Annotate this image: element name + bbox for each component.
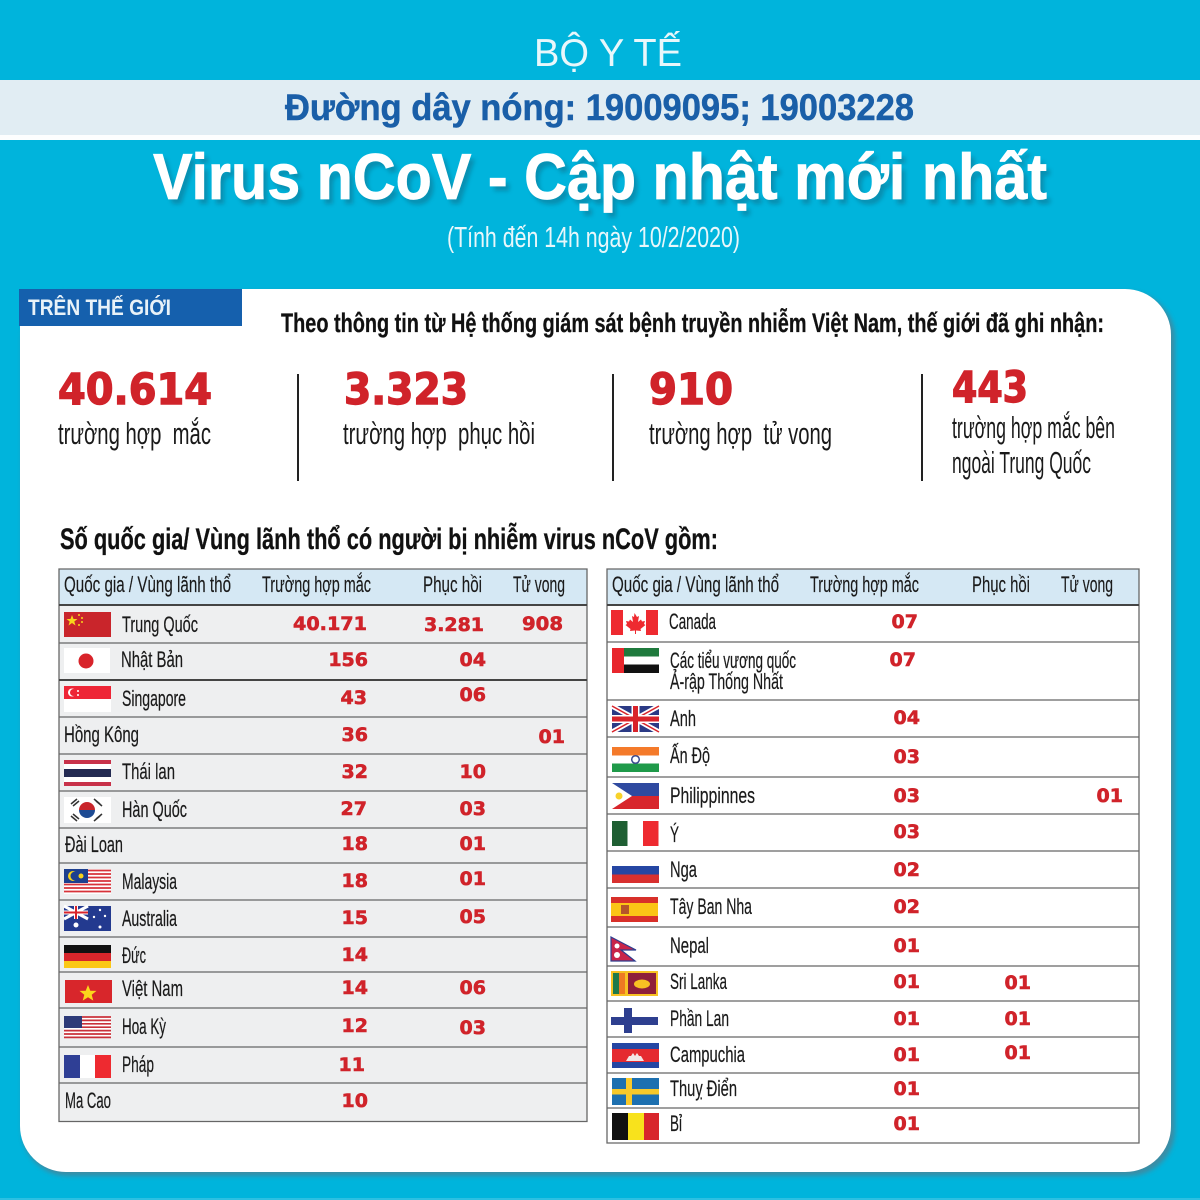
- row: Đài Loan: 01: [460, 833, 486, 855]
- stat: deaths: [649, 365, 832, 451]
- stat: total cases: 40.614: [58, 365, 212, 415]
- row: Các tiểu vương quốc Ả-rập Thống Nhất: [612, 648, 916, 694]
- row: Sri Lanka: 01: [894, 971, 920, 993]
- row: Hàn Quốc: Hàn Quốc: [122, 797, 187, 822]
- row: Các tiểu vương quốc Ả-rập Thống Nhất: Các tiểu vương quốc: [670, 648, 796, 673]
- row: Hàn Quốc: 03: [460, 798, 486, 820]
- row: Đài Loan: Đài Loan: [65, 832, 123, 857]
- title: Virus nCoV - Cập nhật mới nhất: [153, 140, 1047, 213]
- row: Hàn Quốc: 27: [341, 798, 367, 820]
- section tab: TRÊN THẾ GIỚI: [28, 295, 171, 320]
- row: Ma Cao: Ma Cao: [65, 1088, 111, 1113]
- row: Canada: 07: [892, 611, 918, 633]
- stat: total cases: trường hợp mắc: [58, 416, 211, 451]
- row: Nhật Bản: [64, 647, 486, 673]
- row: Ma Cao: 10: [342, 1090, 368, 1112]
- stat: outside China: 443: [952, 363, 1028, 413]
- stat: recovered: trường hợp phục hồi: [343, 416, 535, 451]
- panel: world statistics: [20, 289, 1175, 1176]
- row: Đức: 14: [342, 944, 368, 966]
- left table header: Trường hợp mắc: [262, 572, 371, 597]
- row: Singapore: [64, 684, 486, 712]
- row: Việt Nam: [65, 976, 486, 1003]
- row: Malaysia: Malaysia: [122, 869, 177, 894]
- row: Pháp: Pháp: [122, 1052, 154, 1077]
- row: Đức: [64, 943, 368, 968]
- row: Nepal: 01: [894, 935, 920, 957]
- row: Philippinnes: 01: [1097, 785, 1123, 807]
- row: Campuchia: Campuchia: [670, 1042, 745, 1067]
- row: Campuchia: [612, 1042, 1031, 1068]
- row: Bỉ: Bỉ: [670, 1111, 682, 1136]
- right table header: Quốc gia / Vùng lãnh thổ: [612, 572, 779, 597]
- row: Tây Ban Nha: [611, 894, 920, 922]
- row: Nhật Bản: 04: [460, 649, 486, 671]
- row: Hồng Kông: Hồng Kông: [64, 722, 139, 747]
- row: Australia: 15: [342, 907, 368, 929]
- stat: deaths: trường hợp tử vong: [649, 416, 832, 451]
- row: Sri Lanka: Sri Lanka: [670, 969, 727, 994]
- stat: outside China: ngoài Trung Quốc: [952, 445, 1091, 480]
- row: Australia: Australia: [122, 906, 177, 931]
- row: Anh: 04: [894, 707, 920, 729]
- right table header: Tử vong: [1061, 572, 1113, 597]
- row: Thái lan: 10: [460, 761, 486, 783]
- row: Hoa Kỳ: [64, 1014, 486, 1039]
- row: Ấn Độ: 03: [894, 746, 920, 768]
- row: Nhật Bản: 156: [328, 649, 368, 671]
- row: Tây Ban Nha: 02: [894, 896, 920, 918]
- row: Ý: Ý: [670, 822, 679, 847]
- row: Việt Nam: Việt Nam: [122, 976, 183, 1001]
- row: Malaysia: 18: [342, 870, 368, 892]
- hotline band: Đường dây nóng: 19009095; 19003228: [285, 87, 914, 128]
- row: Thuỵ Điển: [612, 1076, 920, 1105]
- row: Anh: [612, 706, 920, 732]
- row: Pháp: [64, 1052, 365, 1078]
- row: Hoa Kỳ: 03: [460, 1017, 486, 1039]
- row: Thuỵ Điển: Thuỵ Điển: [670, 1076, 737, 1101]
- row: Nepal: [611, 933, 920, 961]
- row: Bỉ: 01: [894, 1113, 920, 1135]
- row: Philippinnes: Philippinnes: [670, 783, 755, 808]
- countries heading: Số quốc gia/ Vùng lãnh thổ có người bị nhiễm virus nCoV gồm:: [60, 522, 718, 556]
- row: Ấn Độ: Ấn Độ: [670, 743, 710, 768]
- row: Canada: Canada: [669, 609, 716, 634]
- row: Nepal: Nepal: [670, 933, 709, 958]
- row: Canada: [611, 609, 918, 635]
- left table header: Phục hồi: [423, 572, 482, 597]
- row: Bỉ: [612, 1111, 920, 1140]
- stat: outside China: [952, 363, 1115, 480]
- row: Ma Cao: [65, 1088, 368, 1113]
- stat: deaths: 910: [649, 365, 733, 415]
- row: Australia: 05: [460, 906, 486, 928]
- right table header: Trường hợp mắc: [810, 572, 919, 597]
- right table header: [612, 572, 1113, 597]
- stat: total cases: [58, 365, 212, 451]
- row: Đài Loan: 18: [342, 833, 368, 855]
- row: Hoa Kỳ: 12: [342, 1015, 368, 1037]
- row: Sri Lanka: [611, 969, 1031, 996]
- row: Việt Nam: 14: [342, 977, 368, 999]
- row: Pháp: 11: [339, 1054, 365, 1076]
- row: Singapore: 06: [460, 684, 486, 706]
- row: Hoa Kỳ: Hoa Kỳ: [122, 1014, 166, 1039]
- row: Phần Lan: 01: [1005, 1008, 1031, 1030]
- row: Thái lan: [64, 759, 486, 786]
- row: Trung Quốc: 3.281: [424, 614, 484, 636]
- row: Trung Quốc: 40.171: [293, 613, 367, 635]
- row: Phần Lan: [611, 1006, 1031, 1033]
- row: Trung Quốc: 908: [522, 613, 563, 635]
- row: Đài Loan: [65, 832, 486, 857]
- row: Ý: 03: [894, 821, 920, 843]
- row: Australia: [64, 906, 486, 931]
- row: Singapore: 43: [341, 687, 367, 709]
- left table header: Tử vong: [513, 572, 565, 597]
- row: Campuchia: 01: [894, 1044, 920, 1066]
- left table header: [64, 572, 565, 597]
- row: Malaysia: [64, 868, 486, 894]
- hotline band: [0, 80, 1200, 140]
- row: Campuchia: 01: [1005, 1042, 1031, 1064]
- row: Hàn Quốc: [64, 797, 486, 823]
- row: Hồng Kông: 01: [539, 726, 565, 748]
- row: Ý: [612, 821, 920, 847]
- table: left countries: [59, 569, 587, 1122]
- row: Singapore: Singapore: [122, 686, 186, 711]
- row: Nga: [612, 857, 920, 883]
- row: Ấn Độ: [612, 743, 920, 772]
- row: Việt Nam: 06: [460, 977, 486, 999]
- row: Phần Lan: Phần Lan: [670, 1006, 729, 1031]
- row: Sri Lanka: 01: [1005, 972, 1031, 994]
- row: Trung Quốc: Trung Quốc: [122, 612, 198, 637]
- row: Thái lan: Thái lan: [122, 759, 175, 784]
- row: Nga: 02: [894, 859, 920, 881]
- row: Nhật Bản: Nhật Bản: [121, 647, 183, 672]
- row: Philippinnes: 03: [894, 785, 920, 807]
- section tab: [19, 289, 242, 326]
- subtitle date: (Tính đến 14h ngày 10/2/2020): [447, 222, 740, 254]
- row: Thái lan: 32: [342, 761, 368, 783]
- row: Malaysia: 01: [460, 868, 486, 890]
- left table header: Quốc gia / Vùng lãnh thổ: [64, 572, 231, 597]
- row: Các tiểu vương quốc Ả-rập Thống Nhất: 07: [890, 649, 916, 671]
- row: Thuỵ Điển: 01: [894, 1078, 920, 1100]
- row: Hồng Kông: 36: [342, 724, 368, 746]
- row: Philippinnes: [612, 783, 1123, 809]
- right table header: Phục hồi: [972, 572, 1030, 597]
- title: Virus nCoV - Cập nhật mới nhất: [157, 145, 1051, 218]
- row: Đức: Đức: [122, 943, 146, 968]
- row: Hồng Kông: [64, 722, 565, 748]
- stat: recovered: 3.323: [344, 365, 468, 415]
- row: Các tiểu vương quốc Ả-rập Thống Nhất: Ả-rập Thống Nhất: [670, 669, 783, 694]
- stat: recovered: [343, 365, 535, 451]
- row: Trung Quốc: [64, 612, 563, 637]
- table: right countries: [607, 569, 1139, 1143]
- row: Phần Lan: 01: [894, 1008, 920, 1030]
- row: Nga: Nga: [670, 857, 697, 882]
- row: Tây Ban Nha: Tây Ban Nha: [670, 894, 752, 919]
- row: Anh: Anh: [670, 706, 696, 731]
- ministry name: BỘ Y TẾ: [534, 31, 682, 75]
